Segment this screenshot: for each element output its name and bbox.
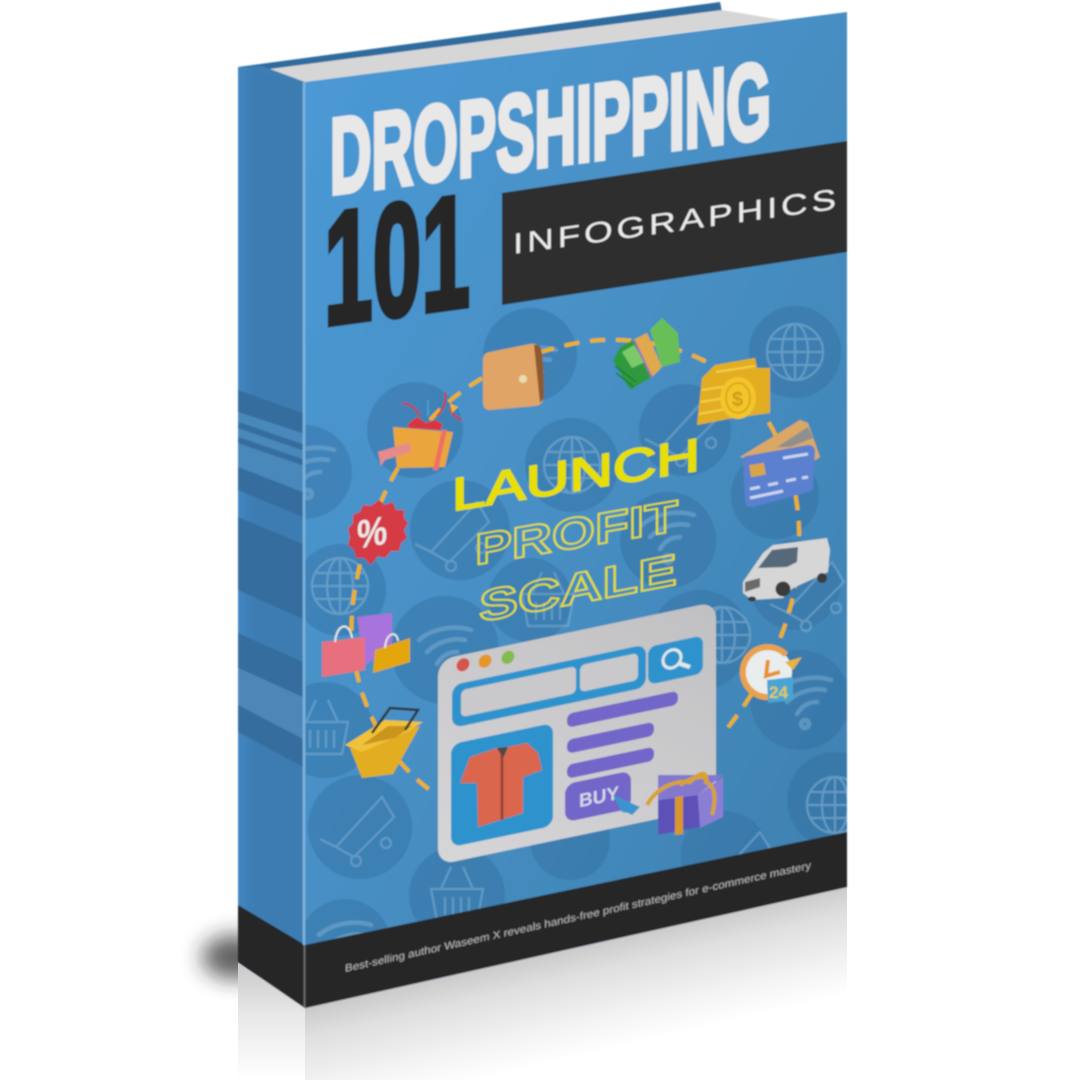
browser panel — [438, 602, 716, 865]
text: PROFIT: PROFIT — [475, 492, 678, 575]
icon: percent badge: % — [357, 507, 387, 558]
dashed orange ring — [352, 340, 799, 795]
banner: INFOGRAPHICS: INFOGRAPHICS — [513, 183, 840, 261]
book spine — [238, 67, 305, 1008]
icon: gift with confetti — [378, 392, 462, 470]
text: LAUNCH: LAUNCH — [452, 428, 700, 521]
text: SCALE: SCALE — [479, 546, 677, 632]
icon: cash stack — [613, 318, 680, 390]
icon: gold coins — [697, 358, 770, 425]
icon: wallet — [483, 344, 544, 410]
floor shadow and reflection — [202, 887, 847, 1080]
icon: 24 hour clock: 24 — [769, 683, 788, 702]
icon: cursor — [613, 795, 640, 815]
spine stripes — [238, 390, 305, 768]
product tile — [451, 723, 553, 847]
book mockup infographic — [188, 1, 848, 1080]
icon: shirt — [460, 743, 542, 827]
icon: yellow basket — [345, 708, 423, 778]
book top edge with pages — [238, 2, 782, 82]
buy button: BUY — [579, 783, 619, 812]
icon: percent badge — [348, 500, 408, 565]
icon: purple gift — [647, 774, 723, 835]
icon: delivery van — [743, 538, 830, 602]
front cover — [302, 11, 848, 1009]
icon: shopping bags — [322, 613, 410, 677]
browser window illustration — [438, 602, 723, 865]
search button — [648, 635, 703, 685]
search bar — [452, 644, 646, 728]
front dark band — [305, 832, 847, 1008]
icon: gold coins: $ — [732, 389, 743, 411]
background pattern circles — [305, 306, 848, 945]
buy button — [565, 770, 631, 822]
tagline: Best-selling author Waseem X reveals hands-free profit strategies for e-commerce mastery — [345, 859, 812, 975]
icon: credit cards — [740, 420, 820, 507]
icon: 24 hour clock — [742, 647, 802, 703]
spine dark band — [238, 905, 305, 1008]
description lines — [567, 691, 678, 779]
banner: INFOGRAPHICS — [502, 141, 847, 305]
window dots — [456, 647, 514, 675]
title: 101: 101 — [324, 162, 470, 360]
